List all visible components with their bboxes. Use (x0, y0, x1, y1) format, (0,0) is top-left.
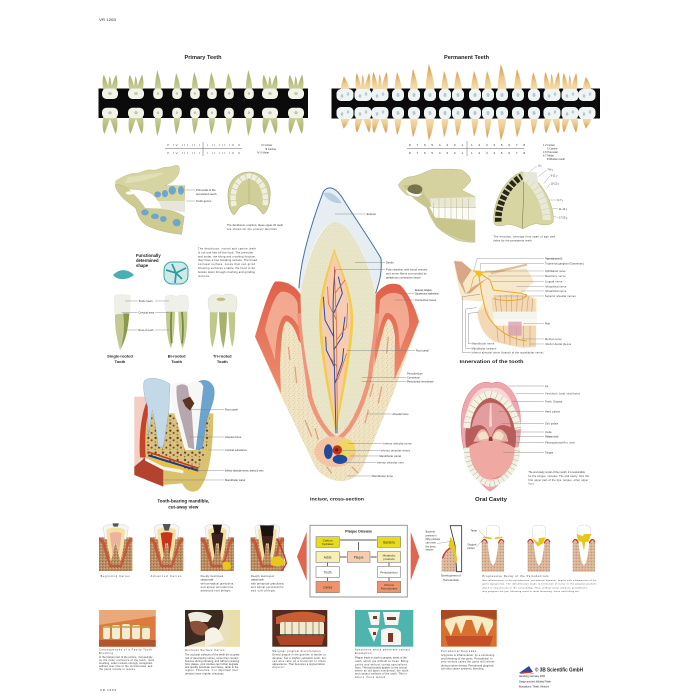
labels: permanent palate (530, 164, 568, 219)
labels: oral cavity: Soft palate (545, 422, 559, 425)
labels: tooth anatomy (122, 299, 169, 332)
labels: permanent palate: 7-8 y (547, 168, 554, 171)
labels: oral cavity: Uvula (545, 431, 552, 434)
text: photo 5: during routine driving. Periodontal gingivitis (441, 664, 494, 667)
labels: bacteria note: the deep (426, 545, 436, 548)
text: tooth shape paragraph: chewing surfaces enable the food to be (198, 266, 256, 270)
caries captions: carious tooth (251, 579, 264, 582)
arrow: left chevron (297, 532, 307, 581)
text: progressive decay of the periodontium: may progress the jaw, following could to tooth loosening, loose and falling out. (482, 590, 580, 593)
box: carbon hydrates (316, 537, 339, 547)
text: photo 2: risk of developing caries, since they contain (185, 657, 239, 660)
notation: permanent teeth (407, 141, 525, 156)
legend: permanent teeth (543, 143, 566, 161)
caries captions: Deeply destroyed, (201, 575, 224, 578)
labels: primary skull (185, 188, 217, 203)
labels: oral cavity: Tongue (545, 452, 554, 455)
text: photo 5: very serious cases the gums will retreat (441, 661, 495, 664)
labels: oral cavity: Lip (545, 385, 549, 388)
imprint text: Hamburg, Germany, 2003 (519, 674, 546, 678)
chart code top: VR 1263 (99, 17, 117, 22)
text: photo 2: from plaque, your cavities can further degrade (185, 663, 239, 666)
labels: oral cavity: Vestibule (oral vestibule) (545, 393, 580, 396)
heading: functionally determined shape: Functionally (136, 253, 161, 258)
primary upper teeth (102, 70, 304, 99)
heading: functionally determined shape: shape (136, 263, 149, 268)
labels: permanent palate: 9-11 y (551, 175, 558, 178)
text: photo 3: appearance. That becomes a pigmentation (272, 663, 326, 666)
caries tile: destroyed with large abscess (251, 525, 286, 571)
labels: innervation: Mandibular foramen (472, 347, 497, 350)
flowchart: plaque disease: Plaque Disease (345, 530, 372, 534)
text: photo 1: Brushing (99, 652, 114, 655)
illustration: innervation of the tooth (454, 258, 544, 353)
caption: primary palate: The deciduous, eruption, these upper 20 teeth (227, 223, 284, 227)
caries captions: Deeply destroyed, (251, 575, 275, 578)
text: photo 4 (355, 649, 410, 679)
heading: permanent teeth: Permanent Teeth (444, 55, 489, 61)
caption: development of periodontitis (441, 574, 461, 582)
labels: primary skull: Primordia of the (196, 188, 216, 192)
labels: oral cavity: Palatoglossal/Ant. arch (545, 441, 576, 444)
labels: primary skull: permanent teeth (196, 192, 217, 196)
labels: bacteria note: can enter (426, 542, 436, 545)
box: carbon hydrates: hydrates (322, 542, 334, 546)
text: photo 3 (272, 650, 326, 669)
caption: innervation: Innervation of the tooth (460, 359, 524, 365)
labels: innervation: Maxillary nerve (545, 275, 566, 278)
text: photo 2: The occlusal surfaces of the teeth are at great (185, 654, 240, 657)
caption: oral cavity paragraph (528, 471, 590, 486)
text: photo 1 (99, 649, 155, 671)
caption: primary palate (227, 223, 284, 231)
text: photo 2: dentists have regular checkups. (185, 672, 225, 675)
legend: permanent teeth: 8 Wisdom tooth (547, 157, 566, 161)
text: photo 4: where there would (355, 676, 386, 679)
permanent lower teeth (336, 107, 596, 141)
caries captions: Beginning Caries (101, 575, 130, 578)
imprint text: Illustrations: Thiele, Hinrichs (519, 684, 550, 688)
text: photo 1: without over time to the cervical area, and (99, 665, 153, 668)
caries captions (101, 575, 285, 593)
text: tooth shape paragraph: in cut and bite off the food. The premolar (198, 250, 253, 254)
panel: photo 4 proximal surface caries teal (355, 610, 413, 647)
caption: oral cavity paragraph: lips. (528, 483, 535, 486)
legend: primary teeth: I II Incisor (261, 143, 272, 147)
box: caries: Caries (323, 585, 333, 589)
box: metabolic products (377, 552, 401, 562)
text: photo 1: In the bottom part of the picture, increasingly (99, 656, 153, 659)
text: photo 3: develop, has a slightly yellowish color, but (272, 657, 326, 660)
labels: permanent palate: 11-13 y (559, 208, 568, 211)
labels: incisor: Alveolar bone (392, 412, 409, 416)
illustration: permanent skull (398, 169, 476, 242)
labels: incisor: Connective tissue (415, 298, 437, 302)
text: photo 4: tooth, which are difficult to clean. Biting (355, 660, 409, 663)
labels: incisor: Periodontal membrane (407, 380, 434, 384)
illustration: oral cavity (461, 382, 521, 491)
box: chronic periodontitis: Chronic (384, 583, 395, 587)
text: progressive decay of the periodontium: which is very precise in the surrounding. Thus, without tartar removal, periodontitis (482, 586, 587, 589)
labels: innervation: Lingual nerve (545, 280, 563, 283)
labels: tooth anatomy: Cervical area (138, 311, 154, 315)
arrows between boxes (328, 540, 389, 581)
labels: innervation: Superior alveolar nerves (545, 295, 576, 298)
captions: root types: Tooth (171, 359, 183, 364)
notation: primary teeth: V IV III II I (167, 143, 200, 147)
labels: incisor: Inferior alveolar vein (377, 460, 404, 464)
heading: primary teeth: Primary Teeth (184, 55, 222, 61)
text: progressive decay of the periodontium (482, 574, 597, 593)
labels: incisor: Root canal (416, 348, 429, 352)
heading: functionally determined shape: determined (136, 258, 159, 263)
text: photo 2: fissures during chewing, and without cleaning (185, 660, 240, 663)
illustration: periodontal section (442, 526, 462, 572)
text: tooth shape paragraph (198, 246, 258, 278)
labels: bacteria note: filthy pockets (426, 538, 441, 541)
flowchart: plaque disease (310, 525, 407, 597)
labels: incisor: and nerve fibers surrounded by (386, 271, 427, 275)
text: photo 4: Specimens which penetrate contact (355, 649, 410, 652)
illustration: primary skull with tooth buds (115, 165, 185, 234)
text: photo 5: Periodontal Degrades (441, 650, 477, 653)
panel: caries progression (99, 523, 286, 593)
text: photo 1: on the outer enclosure of the tooth, neck (99, 659, 155, 662)
heading: oral cavity: Oral Cavity (475, 497, 507, 503)
text: tooth shape paragraph: broken down through crushing and grinding (198, 270, 256, 274)
text: photo 4: caries and without caring specialized (355, 663, 407, 666)
labels: mandible: Inferior alveolar nerve, artery & vein (225, 469, 264, 473)
labels: primary skull: Tooth germs (196, 199, 212, 203)
notation: permanent teeth: 8 7 6 5 4 3 2 1 (409, 143, 463, 147)
notation: permanent teeth: 1 2 3 4 5 6 7 8 (471, 151, 525, 155)
box: metabolic products: products (383, 557, 395, 561)
panel: development of periodontitis (426, 525, 597, 593)
captions: root types: Tri-rooted (213, 354, 232, 359)
labels: incisor: Mandibular bone (372, 474, 394, 478)
labels: permanent palate: 6-7 y (557, 199, 564, 202)
labels: mandible: Cortical substance (225, 448, 247, 452)
legend: primary teeth (257, 143, 277, 154)
illustration: incisor cross-section (255, 188, 419, 481)
text: tooth shape paragraph: they have a fine breaking surface. The broad (198, 258, 258, 262)
illustration: tooth-bearing mandible cut-away (134, 378, 214, 492)
labels: incisor: gelatinous connective tissue (386, 275, 421, 279)
caption: tooth-bearing mandible: Tooth-bearing mandible, (157, 499, 209, 504)
labels: mandible: Alveolar bone (225, 435, 242, 439)
text: photo 4: Plaque leads to tooth to gingiva, areas of the (355, 657, 407, 660)
captions: root types: Single-rooted (107, 354, 133, 359)
labels: incisor: Cementum (407, 375, 421, 379)
panel: photo 3 marginal gingival discoloration (272, 610, 327, 647)
labels: innervation: Mental nerve (545, 338, 562, 341)
text: tooth shape paragraph: motions. (198, 274, 210, 278)
caries captions: advanced root phlegm. (201, 590, 232, 593)
caption: development of periodontitis: Periodontitis (443, 578, 459, 582)
caries captions: with periapical granuloma, (201, 582, 234, 585)
text: photo 2: and quickly penetrate your tissue, tartar in the (185, 666, 239, 669)
labels: oral cavity: Palatine tonsil (545, 436, 559, 439)
text: photo 3: Marginal gingival discoloration (272, 650, 321, 653)
text: progressive decay of the periodontium: Progressive Decay of the Periodontium (482, 574, 549, 578)
labels: innervation: Trigeminal nerve (V) (545, 257, 562, 260)
panel: photo 5 periodontal degrades (441, 610, 497, 647)
labels: innervation: Ophthalmic nerve (545, 270, 566, 273)
caption: tooth-bearing mandible (157, 499, 209, 510)
text: photo 3: Dental plaque in the gumline is harder to (272, 654, 326, 657)
box: chronic periodontitis: Periodontitis (381, 587, 398, 591)
periodontal tile 3 (573, 525, 595, 572)
arrow: right chevron (411, 532, 419, 581)
box: carbon hydrates: Carbon (323, 538, 333, 542)
legend: permanent teeth: 6 7 Molar (543, 154, 554, 158)
periodontal labels (467, 530, 487, 550)
caries captions: carious tooth (201, 579, 214, 582)
labels: bacteria note (426, 531, 451, 552)
box: chronic periodontitis (377, 581, 401, 593)
text: photo 3: can also take on a brownish to black (272, 660, 326, 663)
labels: mandible: Root canal (225, 408, 238, 412)
labels: bacteria note: Bacteria (426, 531, 435, 534)
labels: bacteria note: present in (426, 534, 437, 537)
text: photo 2 (185, 649, 240, 675)
notation: primary teeth (165, 142, 242, 156)
labels: incisor: Squamous epithelium (415, 292, 440, 296)
caption: oral cavity paragraph: first upper part of the lips, tongue, other upper (528, 479, 588, 482)
periodontal labels: Gingival (467, 544, 477, 547)
text: photo 5 (441, 650, 495, 670)
labels: permanent palate: 8 y (538, 164, 542, 167)
caption: oral cavity paragraph: for the tongue, muscles. The oral cavity, from the (528, 475, 590, 478)
illustration: tri-rooted tooth (208, 294, 237, 348)
caption: development of periodontitis: Development of (441, 574, 461, 578)
text: tooth shape paragraph: and molar, the biting and crushing function, (198, 254, 256, 258)
panel: permanent teeth band (332, 64, 600, 141)
text: photo 4: where an old apart interdental, the tooth (355, 670, 409, 673)
text: photo 5: Gingivitis is inflammation, by a continuing (441, 654, 495, 657)
panel: primary teeth band (98, 70, 308, 136)
labels: bacteria note: tissues (426, 549, 434, 552)
labels: innervation: Infraorbital nerve (545, 286, 567, 289)
box: acids: Acids (324, 555, 332, 559)
captions: root types: Bi-rooted (168, 354, 186, 359)
caption: oral cavity paragraph: The oral cavity is part of the mouth, it is responsible (528, 471, 586, 474)
text: tooth shape paragraph: The deciduous, incisal and canine teeth (198, 246, 257, 250)
text: photo 5: and bleeding of the gums. Periodontal. In (441, 657, 493, 660)
caption: permanent palate: The eruption, average time span of age and (493, 234, 555, 238)
labels: incisor: Periodontium (407, 371, 423, 375)
labels: incisor: Inferior alveolar nerve (383, 441, 412, 445)
text: photo 2: Occlusal Surface Caries (185, 649, 225, 652)
caries captions: and apical periodontitis (201, 586, 234, 589)
logo: 3B Scientific (519, 666, 583, 674)
text: photo 4: Enamelium (355, 652, 372, 655)
text: progressive decay of the periodontium: gums (gingivitis). The inflammation leads to formation of tartar in the gingival pockets (482, 582, 596, 585)
text: photo 1: brushing, under incisors strongly, recognition (99, 662, 153, 665)
labels: permanent palate: 17-25 y (559, 216, 568, 219)
logo: 3B Scientific: © 3B Scientific GmbH (535, 666, 583, 674)
labels: tooth anatomy: Root of tooth (138, 328, 154, 332)
caries tile: deeply destroyed with abscess (201, 525, 234, 571)
labels: innervation: Infraorbital nerve (545, 290, 567, 293)
text: photo 2: region. Therefore, it is important that (185, 669, 238, 672)
labels: incisor: Inferior alveolar artery (381, 448, 411, 452)
periodontal labels: Tartar (471, 530, 477, 533)
periodontal tile 2 (528, 525, 550, 572)
periodontal tile 1 (482, 525, 504, 572)
caries captions: with periapical granuloma, (251, 582, 285, 585)
text: photo 1: the gums recede in recess. (99, 668, 136, 671)
text: photo 1: Consequences of a Faulty Tooth (99, 649, 152, 652)
text: photo 4: floss. The particularly applies to the incisal (355, 667, 407, 670)
caption: incisor: Incisor, cross-section (310, 496, 364, 502)
text: progressive decay of the periodontium: Non-inflammatory, in the periodontium, periodontal ligament, begins with inflammation of the (482, 579, 597, 582)
caption: permanent palate (493, 234, 555, 242)
labels: innervation: Mandibular nerve (472, 343, 495, 346)
labels: innervation (472, 257, 584, 355)
text: photo 3: deposit. (272, 666, 286, 669)
imprint text (519, 674, 552, 688)
labels: incisor: Mandibular canal (379, 454, 401, 458)
labels: mandible (163, 408, 264, 482)
labels: tooth anatomy: Tooth crown (138, 299, 153, 303)
icon: molar occlusal surface (164, 262, 188, 284)
periodontal labels: pocket (467, 547, 475, 550)
caries tile: advanced (150, 524, 183, 571)
notation: primary teeth: I II III IV V (207, 151, 240, 155)
permanent upper teeth (336, 64, 596, 101)
illustration: permanent palate (494, 172, 553, 229)
legend: permanent teeth: 1 2 Incisor (543, 143, 555, 147)
labels: oral cavity: Teeth, Gingiva (545, 401, 563, 404)
labels: oral cavity: Hard palate (545, 410, 561, 413)
icon: incisal edge (113, 270, 134, 279)
labels: permanent palate: 10-12 y (551, 182, 560, 185)
caption: tooth-bearing mandible: cut-away view (168, 505, 199, 510)
notation: permanent teeth: 8 7 6 5 4 3 2 1 (409, 151, 463, 155)
notation: primary teeth: I II III IV V (207, 143, 240, 147)
imprint text: Design and text: Winfried Thiele (519, 680, 552, 684)
text: tooth shape paragraph: occlusal surface, cusps that can grind (198, 262, 256, 266)
legend: primary teeth: III Canine (265, 147, 277, 151)
labels: innervation: Inferior dental plexus (545, 343, 572, 346)
illustration: bi-rooted tooth (165, 295, 188, 348)
notation: primary teeth: V IV III II I (167, 151, 200, 155)
labels: innervation: Inferior alveolar nerve (branch of the mandibular nerve) (472, 352, 543, 355)
labels: innervation: Pulp (545, 323, 551, 326)
chart code bottom: VR 1263 (100, 688, 116, 692)
labels: oral cavity (498, 385, 580, 455)
box: periodontium: Periodontium (380, 570, 398, 574)
text: photo 5: can also cause systemic bleeding. (441, 667, 485, 670)
illustration: single-rooted tooth (114, 294, 131, 350)
text: photo 4: and contact surfaces of the tooth. This is (355, 673, 407, 676)
legend: permanent teeth: 3 Canine (547, 146, 558, 150)
labels: incisor: Enamel, Gingiva (415, 288, 432, 292)
box: plaque: Plaque (354, 555, 364, 559)
captions: root types: Tooth (217, 359, 228, 364)
labels: incisor (335, 212, 440, 478)
notation: permanent teeth: 1 2 3 4 5 6 7 8 (471, 143, 525, 147)
panel: photo 1 faulty brushing (99, 610, 156, 647)
captions: root types (107, 354, 232, 364)
legend: primary teeth: IV V Molar (257, 150, 269, 154)
illustration: primary palate (228, 172, 270, 215)
caption: permanent palate: times for the permanent teeth (493, 238, 532, 242)
box: metabolic products: Metabolic (383, 553, 396, 557)
box: tooth: Tooth (324, 570, 332, 574)
labels: incisor: Pulp chamber with blood vessels (386, 268, 428, 272)
labels: incisor: Dentin (386, 261, 394, 265)
caries captions: and apical periodontitis (251, 586, 284, 589)
caries captions: and soft phlegm. (251, 590, 276, 593)
heading: functionally determined shape (136, 253, 161, 268)
captions: root types: Tooth (115, 359, 126, 364)
caries tile: beginning (99, 523, 132, 571)
labels: incisor: Enamel (367, 212, 376, 216)
panel: photo 2 interior tooth surface (185, 610, 240, 647)
legend: permanent teeth: 4 5 Premolar (543, 150, 558, 154)
labels: mandible: Mandibular canal (225, 478, 246, 482)
labels: innervation: Trigeminal ganglion (Gasserian) (545, 262, 584, 265)
caries captions: Advanced Caries (151, 575, 182, 578)
primary lower teeth (102, 108, 304, 136)
caption: primary palate: are shown for the primary dentition (227, 227, 278, 231)
box: bacteria: Bacteria (383, 540, 395, 544)
